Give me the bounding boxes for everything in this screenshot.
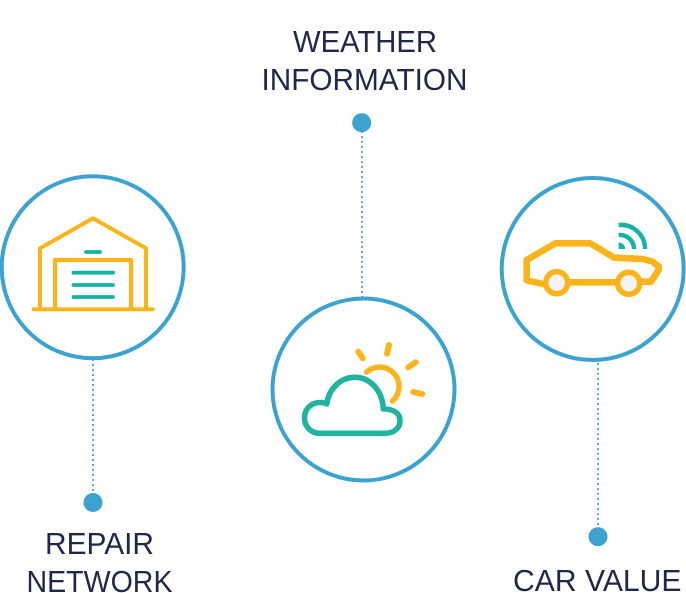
- panel: car value icon: [502, 178, 684, 360]
- icon: garage: [34, 218, 153, 309]
- icon: connected car: [527, 225, 659, 294]
- dot: repair network marker: [84, 493, 102, 512]
- dot: weather information marker: [352, 113, 371, 132]
- heading: weather information: INFORMATION: [262, 63, 468, 97]
- icon: sun and cloud: [304, 345, 422, 433]
- dot: car value marker: [588, 527, 608, 546]
- panel: repair network icon: [2, 176, 184, 358]
- heading: repair network: [26, 527, 172, 593]
- heading: repair network: REPAIR: [45, 527, 154, 561]
- heading: weather information: WEATHER: [293, 25, 437, 59]
- panel: weather information icon: [272, 298, 454, 480]
- heading: weather information: [262, 25, 468, 97]
